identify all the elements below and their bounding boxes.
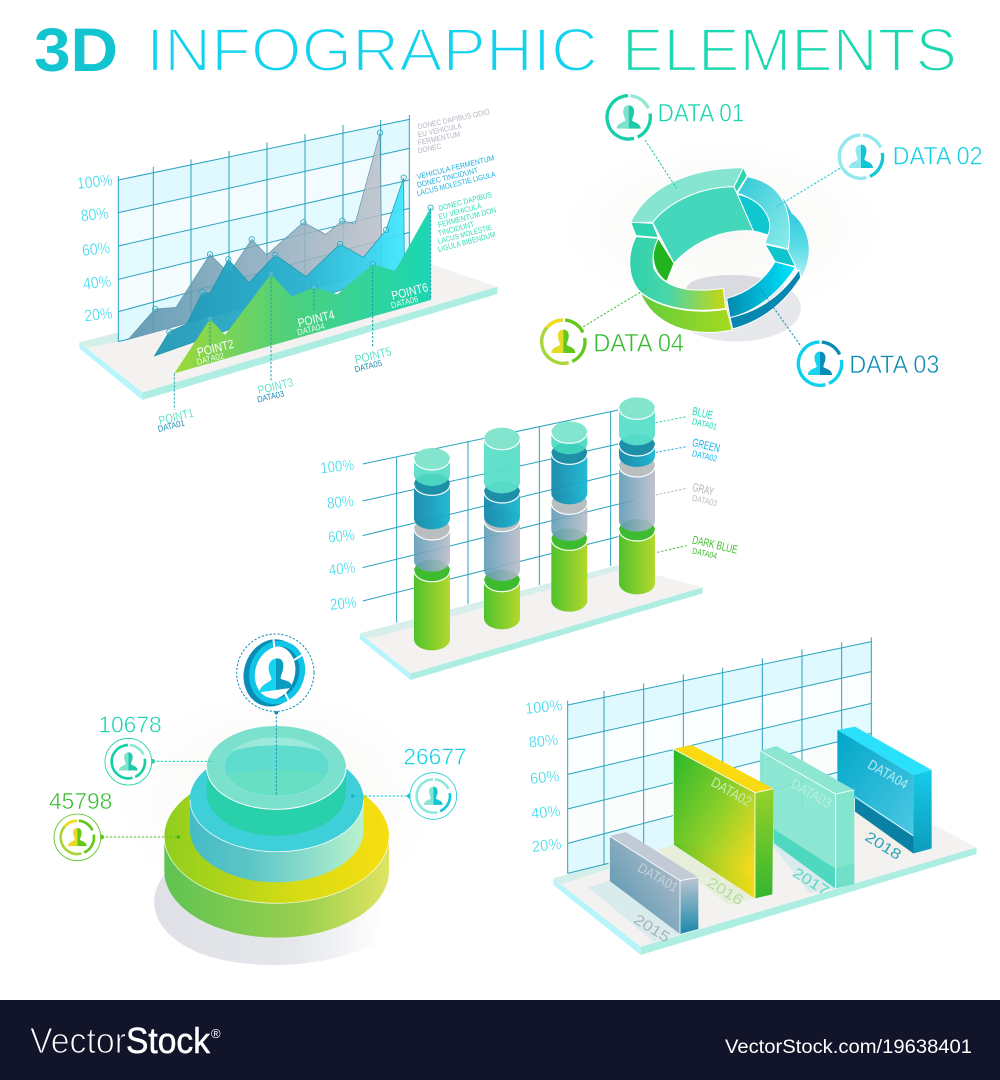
axis labels: 60%: [81, 239, 111, 260]
footer logo: Vector: [30, 1020, 126, 1061]
point labels: POINT2: [196, 337, 235, 360]
axis labels: 40%: [82, 272, 112, 293]
title: INFOGRAPHIC: [146, 16, 598, 84]
bar: data 03: [760, 746, 854, 888]
icon: 26677: [410, 773, 457, 819]
cylinder 3: [551, 421, 587, 612]
legend text: green: EU VEHICULA: [438, 201, 483, 221]
layer 1: bottom: [164, 770, 389, 938]
legend labels: GREEN: [691, 436, 721, 455]
axis labels: 100%: [76, 171, 114, 193]
legend text: gray: DONEC: [417, 141, 443, 155]
point labels: DATA06: [390, 294, 419, 310]
layer 2: middle: [190, 748, 364, 882]
ring segment: data 03: [727, 262, 801, 329]
panel: layered pyramid chart: [49, 634, 467, 965]
label: data 01: DATA 01: [658, 101, 744, 128]
icon: 45798: [54, 814, 101, 861]
axis labels: 20%: [329, 594, 358, 614]
axis labels: 60%: [529, 768, 560, 788]
legend text: gray: DONEC DAPIBUS ODIO: [417, 107, 491, 131]
point labels: DATA01: [157, 418, 186, 434]
grid lines: [363, 410, 635, 623]
cylinder 4: [619, 397, 655, 594]
point labels: POINT5: [353, 344, 393, 367]
axis labels: [76, 171, 114, 325]
axis labels: 80%: [528, 732, 559, 752]
floor slab: [553, 790, 977, 955]
point labels: DATA05: [353, 358, 383, 374]
icon: data 02: [836, 132, 886, 182]
legend labels: DATA01: [691, 416, 718, 432]
legend text: green: TINCIDUNT: [437, 220, 476, 238]
legend labels: GRAY: [691, 481, 715, 499]
grid panel: [118, 115, 409, 342]
point labels: DATA02: [195, 350, 225, 367]
ring segment: data 02: [737, 177, 809, 277]
connector dots: [99, 710, 412, 839]
axis labels: [524, 697, 563, 856]
legend text: green: LIGULA BIBENDUM: [437, 230, 496, 254]
point labels: POINT3: [256, 375, 295, 398]
data point markers: [152, 130, 433, 334]
axis labels: 40%: [530, 803, 561, 823]
icon: data 03: [795, 339, 845, 389]
icon: data 01: [604, 92, 654, 142]
panel: stacked cylinder chart: [320, 397, 739, 680]
bar: data 02: [673, 745, 773, 898]
legend text: blue: VEHICULA FERMENTUM: [416, 153, 495, 181]
leader lines: [583, 140, 840, 345]
icon: data 04: [538, 317, 588, 367]
series: blue area: [154, 178, 404, 356]
year labels: [631, 829, 904, 946]
year labels: 2017: [790, 865, 831, 900]
soft glow: [563, 142, 883, 315]
leader lines: [102, 712, 409, 837]
bar: data 02: DATA02: [708, 774, 755, 810]
bar: data 01: [609, 832, 698, 934]
legend text: gray: [417, 107, 491, 155]
grid panel: [568, 637, 871, 873]
series: green area: [174, 208, 431, 373]
value: 26677: 26677: [403, 743, 467, 769]
panel: 3D bar chart: [524, 637, 977, 955]
legend labels: DARK BLUE: [691, 534, 739, 557]
label: data 02: DATA 02: [893, 143, 983, 170]
icon: top 3D badge: [237, 634, 314, 711]
axis labels: [320, 457, 358, 614]
title: 3D: [34, 16, 118, 84]
footer logo: ®: [211, 1026, 221, 1041]
axis labels: 20%: [531, 836, 562, 856]
legend labels: [691, 405, 739, 561]
footer url: VectorStock.com/19638401: [725, 1037, 972, 1058]
point labels: DATA04: [296, 321, 326, 337]
legend leader lines: [656, 417, 687, 552]
axis labels: 40%: [328, 560, 356, 579]
drop lines: [174, 208, 431, 410]
floor slab: [360, 565, 703, 680]
year labels: 2015: [631, 912, 672, 946]
legend text: blue: LACUS MOLESTIE LIGULA: [416, 170, 497, 198]
legend text: gray: FERMENTUM: [417, 129, 461, 147]
legend labels: BLUE: [691, 405, 714, 422]
point labels: POINT1: [157, 406, 195, 428]
ring segment: data 04: [630, 237, 732, 332]
value: 45798: 45798: [49, 788, 112, 814]
axis labels: 80%: [80, 204, 110, 225]
legend labels: DATA02: [691, 448, 718, 464]
ring shadow: [672, 275, 801, 342]
footer logo: Stock: [126, 1020, 211, 1061]
legend text: green: [437, 190, 497, 254]
legend text: blue: DONEC TINCIDUNT: [416, 166, 479, 190]
bar: data 03: DATA03: [788, 775, 835, 811]
cylinder 1: [414, 448, 450, 650]
footer bar: [0, 1000, 1000, 1080]
label: data 03: DATA 03: [849, 352, 939, 379]
floor slab: [79, 257, 497, 400]
title: ELEMENTS: [622, 16, 957, 84]
series: gray area: [128, 133, 382, 339]
bar: data 04: [837, 727, 932, 853]
icon: 10678: [105, 738, 152, 785]
bar shadows: [588, 810, 913, 942]
legend text: gray: EU VEHICULA: [417, 121, 463, 139]
title: [34, 16, 957, 84]
bar: data 01: DATA01: [635, 859, 681, 895]
ring segment: data 01: [631, 168, 753, 263]
point labels: POINT4: [296, 308, 336, 330]
soft glow: [117, 692, 437, 912]
panel: area line chart: [76, 107, 497, 434]
axis labels: 80%: [326, 493, 355, 513]
axis labels: 60%: [327, 527, 356, 547]
legend labels: DATA03: [691, 493, 718, 508]
layer 3: top: [207, 726, 346, 836]
year labels: 2018: [862, 829, 904, 864]
point labels: DATA03: [256, 388, 285, 405]
legend labels: DATA04: [691, 546, 718, 561]
legend text: green: FERMENTUM DON: [437, 205, 497, 230]
panel: 3D ring chart: [538, 92, 983, 389]
axis labels: 100%: [524, 697, 563, 718]
legend text: blue: [416, 153, 497, 198]
bar: data 04: DATA04: [865, 756, 911, 792]
point labels: POINT6: [390, 280, 430, 303]
axis labels: 100%: [320, 457, 355, 477]
label: data 04: DATA 04: [593, 331, 684, 358]
point labels: [157, 280, 430, 434]
year labels: 2016: [704, 875, 746, 909]
value: 10678: 10678: [98, 712, 162, 738]
cylinder 2: [484, 428, 520, 629]
footer logo: [30, 1020, 221, 1061]
legend text: green: DONEC DAPIBUS: [438, 190, 493, 213]
legend text: green: LACUS MOLESTIE: [437, 223, 493, 246]
pyramid shadow: [154, 865, 387, 965]
axis labels: 20%: [84, 304, 113, 325]
